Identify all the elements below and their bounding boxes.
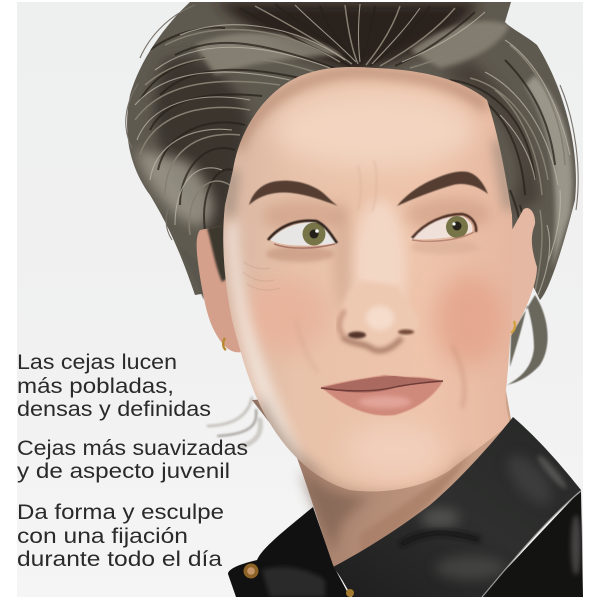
benefit 1 text: más pobladas, xyxy=(17,375,174,398)
eyebrow: left xyxy=(249,181,338,206)
jacket: body right xyxy=(480,490,583,597)
benefit 3 text: durante todo el día xyxy=(17,548,222,571)
hair: flyaway strands xyxy=(126,5,578,240)
hair: main mass xyxy=(126,2,578,385)
eyebrow: right xyxy=(397,171,488,206)
hair: in front of left ear xyxy=(206,225,226,283)
eye: right xyxy=(410,214,476,241)
benefit 3 text xyxy=(17,501,224,571)
button: lower snap xyxy=(346,589,354,597)
hair: tail left of ear xyxy=(200,294,204,300)
button: left snap xyxy=(244,564,258,578)
ear: left xyxy=(196,226,241,352)
eye: left xyxy=(268,221,337,248)
benefit 2 text xyxy=(17,437,248,483)
benefit 2 text: Cejas más suavizadas xyxy=(17,437,248,460)
benefit 2 text: y de aspecto juvenil xyxy=(17,460,230,483)
benefit 1 text xyxy=(17,351,211,421)
hair: light strands xyxy=(135,4,570,295)
benefit 1 text: Las cejas lucen xyxy=(17,351,177,374)
neck xyxy=(252,391,511,566)
jacket: left shoulder xyxy=(228,507,350,597)
hair: mid strands xyxy=(135,5,565,300)
jacket: leather collar xyxy=(333,417,581,597)
nasolabial fold xyxy=(452,345,464,408)
brow furrow xyxy=(372,161,376,211)
lips xyxy=(321,375,443,416)
earring: right xyxy=(511,321,515,333)
hair: right lock xyxy=(507,295,548,385)
hair: dark strands xyxy=(139,4,556,230)
hair: wisps at neck xyxy=(208,398,260,447)
face shading xyxy=(275,92,475,168)
eye socket shadows xyxy=(262,199,346,233)
earring: left xyxy=(223,338,226,350)
benefit 1 text: densas y definidas xyxy=(17,398,211,421)
ear: right xyxy=(510,208,537,336)
face xyxy=(223,67,513,510)
nose xyxy=(339,280,418,351)
benefit 3 text: con una fijación xyxy=(17,525,188,548)
benefit 3 text: Da forma y esculpe xyxy=(17,501,224,524)
crow's feet xyxy=(243,262,280,290)
